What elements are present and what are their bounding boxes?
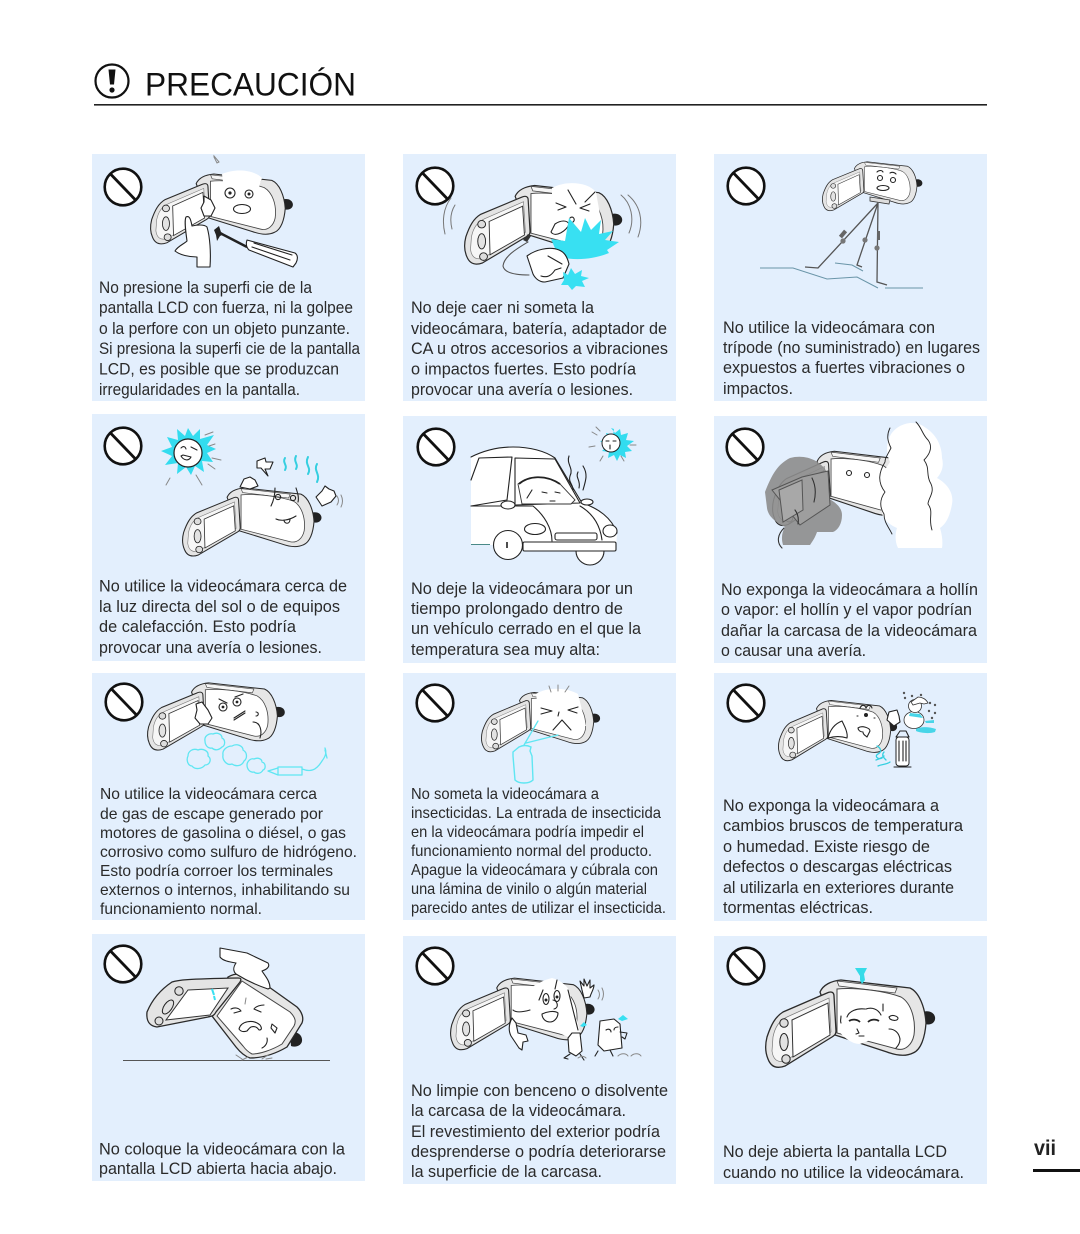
description: Si presiona la superfi cie de la pantalla: [99, 339, 360, 358]
description: de calefacción. Esto podría: [99, 617, 297, 636]
panel: no presionar LCD: [92, 154, 365, 401]
description: cambios bruscos de temperatura: [723, 816, 964, 835]
description: No utilice la videocámara con: [723, 318, 935, 337]
illustration: insecticide spray: [481, 685, 600, 783]
panel: no someter a insecticidas: [403, 673, 676, 920]
illustration: sun and hot camcorder: [161, 428, 342, 556]
description: [723, 796, 964, 917]
description: tiempo prolongado dentro de: [411, 599, 623, 618]
page number: [1033, 1137, 1080, 1172]
description: parecido antes de utilizar el insecticida.: [411, 900, 666, 917]
description: No coloque la videocámara con la: [99, 1140, 346, 1158]
description: pantalla LCD abierta hacia abajo.: [99, 1159, 337, 1178]
description: expuestos a fuertes vibraciones o: [723, 358, 965, 377]
icon: prohibited: [105, 169, 141, 205]
description: No deje la videocámara por un: [411, 579, 633, 598]
description: [99, 576, 347, 657]
description: LCD, es posible que se produzcan: [99, 360, 339, 378]
description: No utilice la videocámara cerca de: [99, 576, 347, 596]
description: en la videocámara podría impedir el: [411, 824, 644, 841]
panel: no exponer a hollín o vapor: [714, 416, 987, 663]
illustration: tired camcorder: [766, 968, 935, 1067]
description: corrosivo como sulfuro de hidrógeno.: [100, 844, 357, 861]
description: la superficie de la carcasa.: [411, 1162, 602, 1181]
description: videocámara, batería, adaptador de: [411, 319, 667, 338]
panel: no dejar dentro del vehículo: [403, 416, 676, 663]
description: Apague la videocámara y cúbrala con: [411, 862, 658, 879]
panel: no dejar abierta la LCD: [714, 936, 987, 1184]
illustration: temperature change and snowman: [778, 692, 936, 767]
description: un vehículo cerrado en el que la: [411, 619, 642, 638]
icon: prohibited: [106, 684, 142, 720]
icon: prohibited: [728, 168, 764, 204]
description: una lámina de vinilo o algún material: [411, 881, 647, 898]
description: provocar una avería o lesiones.: [99, 638, 322, 657]
illustration: camcorder on tripod: [760, 162, 923, 288]
illustration: camcorder and exhaust gas: [147, 683, 327, 775]
description: o causar una avería.: [721, 641, 866, 660]
title: [94, 64, 987, 106]
description: [411, 579, 642, 659]
description: cuando no utilice la videocámara.: [723, 1163, 964, 1182]
description: No someta la videocámara a: [411, 786, 599, 803]
description: [99, 1140, 346, 1178]
icon: prohibited: [105, 428, 141, 464]
description: temperatura sea muy alta:: [411, 640, 600, 659]
description: [721, 580, 978, 660]
description: provocar una avería o lesiones.: [411, 380, 633, 399]
description: externos o internos, inhabilitando su: [100, 882, 350, 899]
icon: prohibited: [105, 946, 141, 982]
description: [99, 278, 360, 399]
description: [100, 786, 357, 918]
description: funcionamiento normal.: [100, 901, 262, 918]
description: o humedad. Existe riesgo de: [723, 837, 930, 856]
description: trípode (no suministrado) en lugares: [723, 338, 980, 357]
description: No limpie con benceno o disolvente: [411, 1081, 668, 1100]
icon: prohibited: [417, 685, 453, 721]
description: [411, 298, 668, 399]
panel: no exponer a cambios de temperatura: [714, 673, 987, 921]
description: o impactos fuertes. Esto podría: [411, 360, 637, 378]
description: No utilice la videocámara cerca: [100, 786, 317, 803]
description: [411, 1081, 668, 1181]
illustration: camcorder face down: [123, 948, 330, 1060]
description: tormentas eléctricas.: [723, 898, 873, 917]
description: No exponga la videocámara a hollín: [721, 580, 978, 599]
description: El revestimiento del exterior podría: [411, 1122, 661, 1141]
icon: prohibited: [417, 168, 453, 204]
title: PRECAUCIÓN: [145, 66, 356, 102]
panel: no usar cerca de gas de escape: [92, 673, 365, 920]
description: la carcasa de la videocámara.: [411, 1101, 626, 1120]
icon: prohibited: [417, 948, 453, 984]
description: funcionamiento normal del producto.: [411, 843, 652, 860]
panel: no limpiar con benceno: [403, 936, 676, 1184]
description: o la perfore con un objeto punzante.: [99, 319, 350, 338]
illustration: car under the sun: [471, 427, 636, 565]
description: No presione la superfi cie de la: [99, 278, 312, 297]
description: insecticidas. La entrada de insecticida: [411, 805, 661, 822]
description: No deje caer ni someta la: [411, 298, 595, 317]
description: o vapor: el hollín y el vapor podrían: [721, 600, 972, 619]
description: [723, 1142, 964, 1182]
description: motores de gasolina o diésel, o gas: [100, 825, 346, 842]
description: CA u otros accesorios a vibraciones: [411, 339, 668, 358]
panel: no colocar con LCD abajo: [92, 934, 365, 1181]
illustration: camcorder in soot and steam: [765, 422, 952, 548]
panel: no usar cerca del calor: [92, 414, 365, 661]
illustration: falling camcorder with adapter: [443, 183, 641, 290]
description: [411, 786, 666, 917]
description: de gas de escape generado por: [100, 806, 324, 823]
panel: no usar trípode con vibraciones: [714, 154, 987, 401]
description: desprenderse o podría deteriorarse: [411, 1142, 666, 1161]
icon: prohibited: [728, 948, 764, 984]
illustration: camcorder with screwdriver: [151, 156, 297, 267]
icon: prohibited: [728, 685, 764, 721]
description: Esto podría corroer los terminales: [100, 863, 333, 880]
description: No exponga la videocámara a: [723, 796, 940, 815]
description: irregularidades en la pantalla.: [99, 380, 300, 399]
description: dañar la carcasa de la videocámara: [721, 621, 978, 640]
description: al utilizarla en exteriores durante: [723, 878, 954, 897]
description: No deje abierta la pantalla LCD: [723, 1142, 947, 1161]
icon: prohibited: [727, 429, 763, 465]
icon: exclamation mark: [96, 64, 128, 98]
description: impactos.: [723, 379, 793, 398]
description: la luz directa del sol o de equipos: [99, 597, 340, 616]
panel: no dejar caer: [403, 154, 676, 401]
icon: prohibited: [418, 429, 454, 465]
description: defectos o descargas eléctricas: [723, 857, 952, 876]
page number: vii: [1034, 1137, 1056, 1160]
illustration: camcorder and solvent: [451, 978, 641, 1060]
description: pantalla LCD con fuerza, ni la golpee: [99, 298, 353, 317]
description: [723, 318, 980, 398]
